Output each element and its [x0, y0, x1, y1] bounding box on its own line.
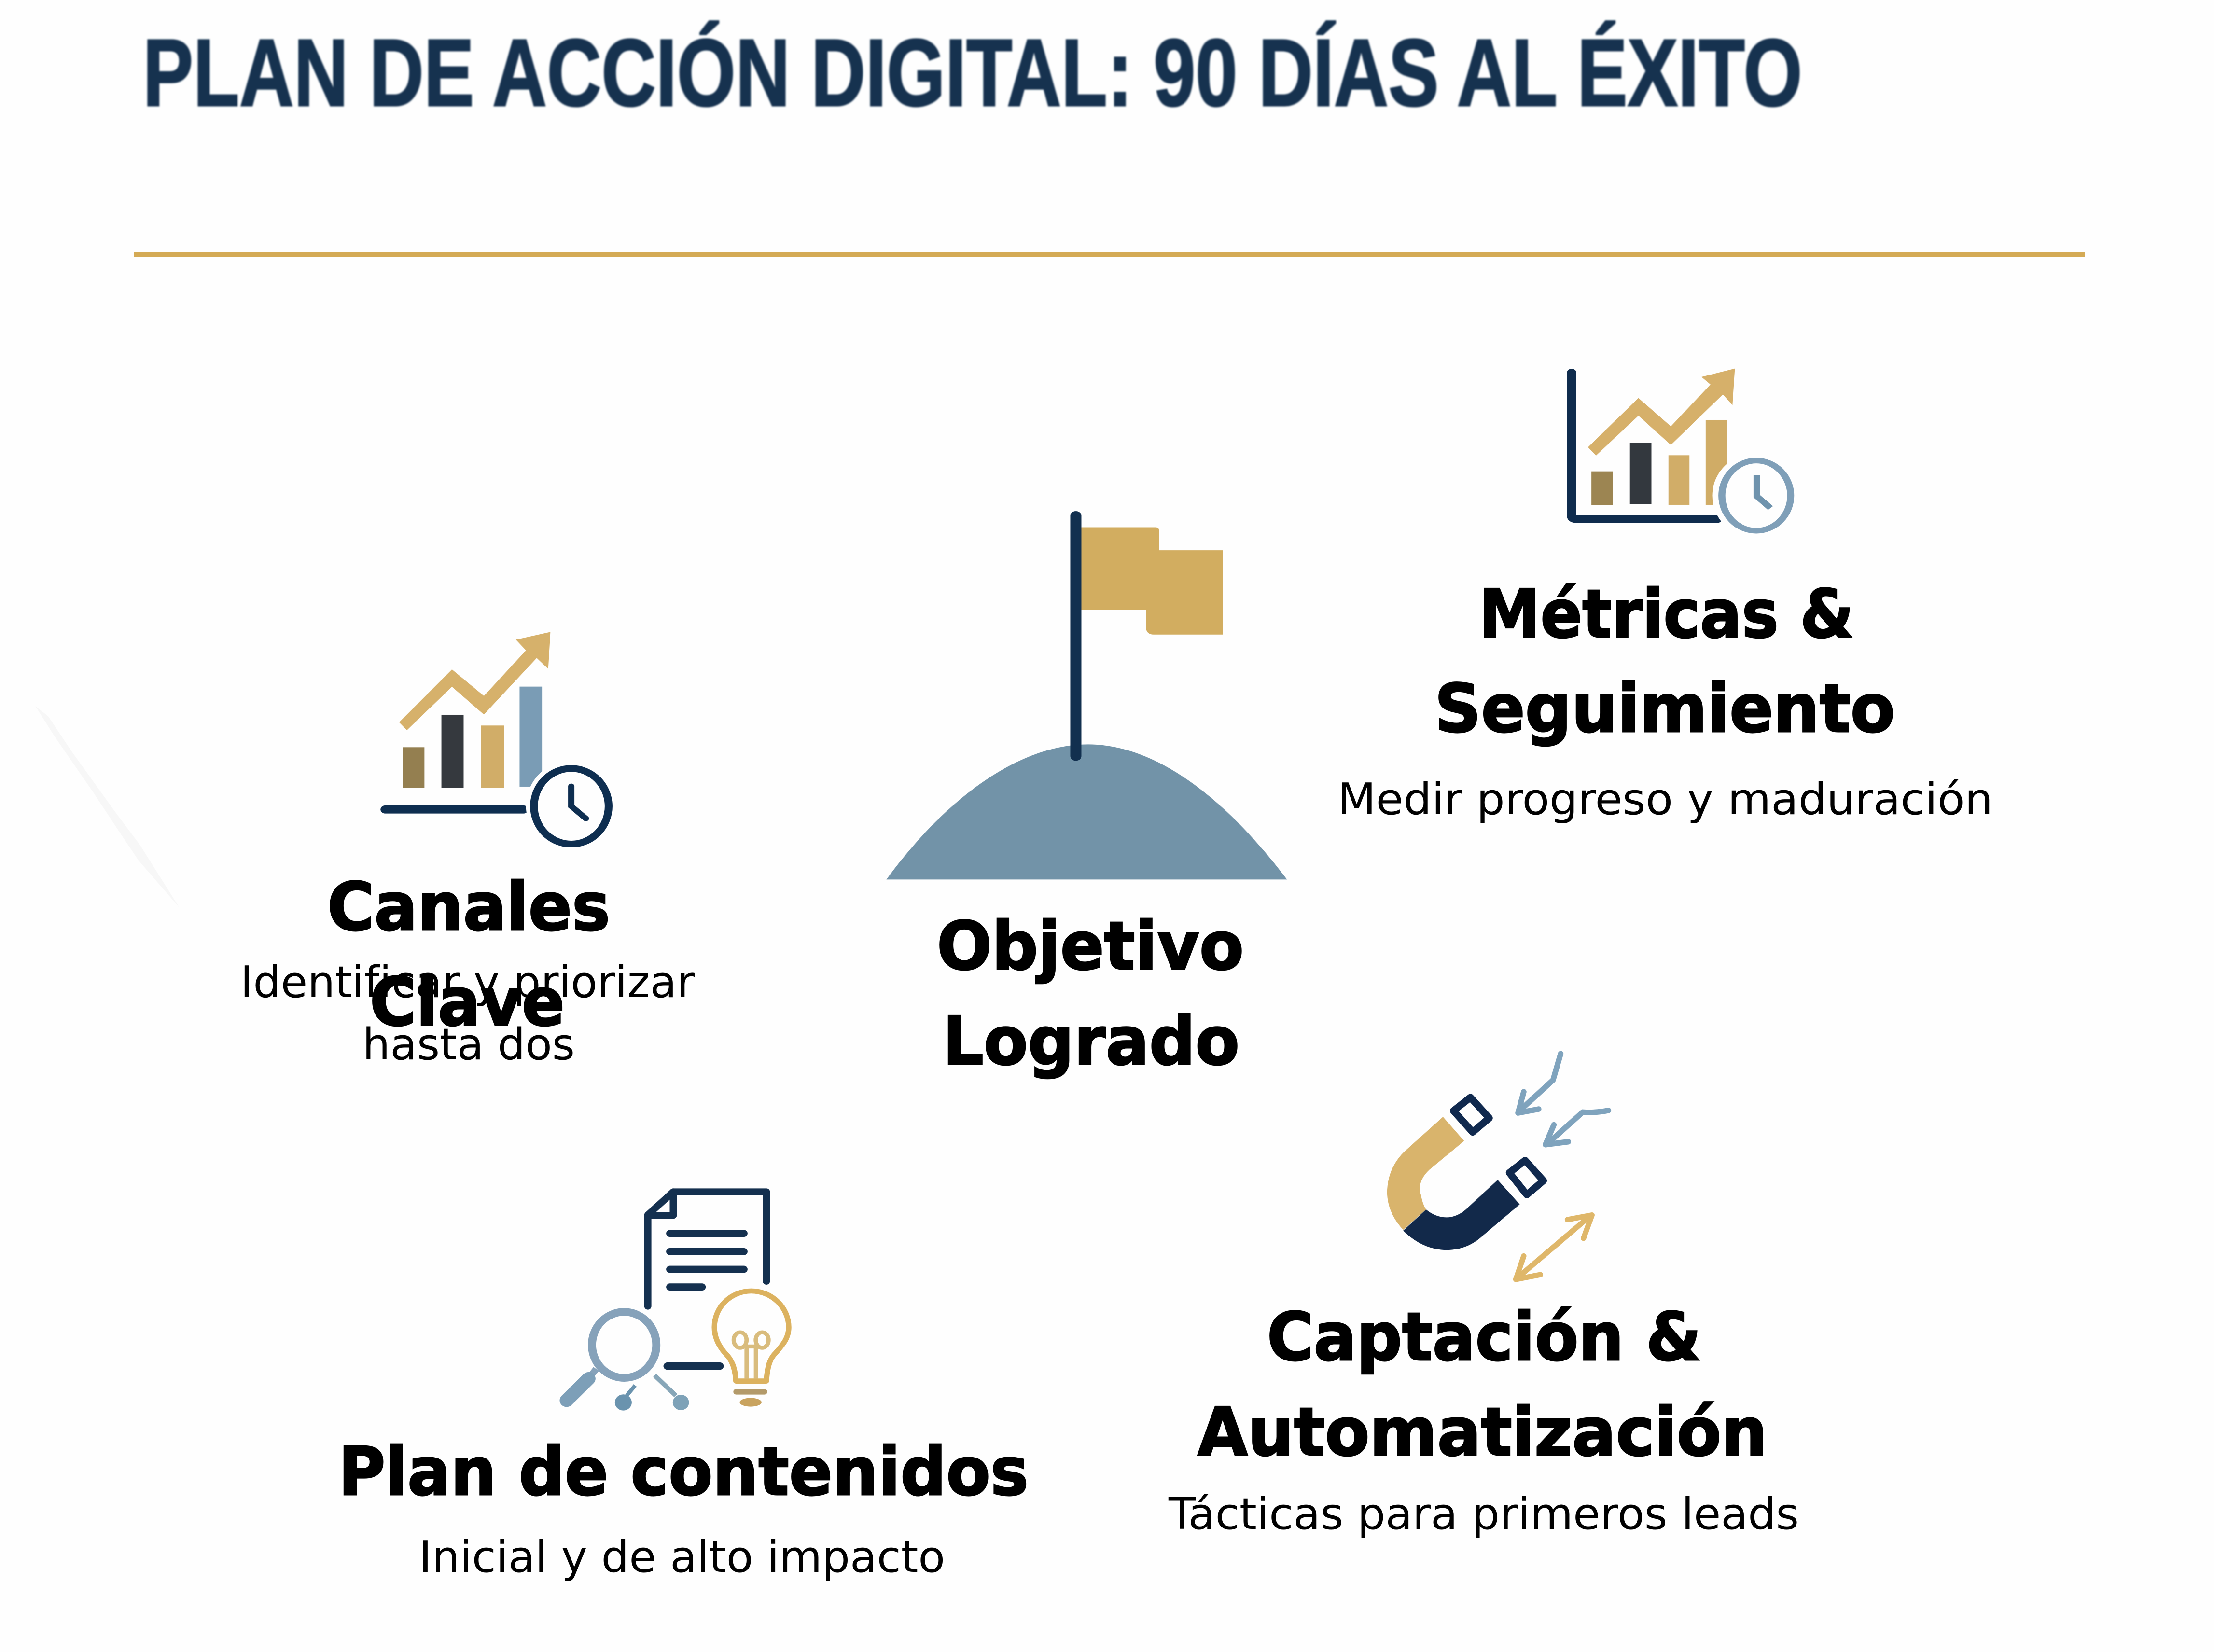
icon: magnet with arrows	[1387, 1054, 1608, 1279]
heading: Objetivo Logrado: Logrado	[943, 1002, 1239, 1080]
heading: Captación & Automatización: Captación &	[1267, 1298, 1701, 1376]
heading: Objetivo Logrado: Objetivo	[937, 907, 1244, 985]
panel: Plan de contenidos	[338, 1192, 1029, 1583]
title underline	[134, 252, 2085, 257]
heading: Captación & Automatización	[1198, 1298, 1768, 1471]
heading: Canales: Canales	[327, 868, 610, 946]
heading: Clave: Clave	[370, 963, 565, 1041]
faint brush streak	[35, 706, 180, 908]
title: PLAN DE ACCIÓN DIGITAL: 90 DÍAS AL ÉXITO	[143, 19, 1802, 126]
icon: chart with clock (metrics)	[1572, 369, 1800, 538]
heading: Captación & Automatización: Automatización	[1198, 1393, 1768, 1471]
icon: flag on mountain	[886, 511, 1287, 879]
description: Tácticas para primeros leads: Tácticas para primeros leads	[1168, 1489, 1799, 1540]
heading: Métricas & Seguimiento	[1434, 575, 1895, 748]
description: Identificar y priorizar hasta dos: hasta dos	[362, 1019, 575, 1070]
heading: Métricas & Seguimiento: Seguimiento	[1434, 670, 1895, 748]
heading: Objetivo Logrado	[937, 907, 1244, 1080]
panel: Canales Clave	[240, 632, 695, 1070]
description: Identificar y priorizar hasta dos	[240, 957, 695, 1070]
description: Medir progreso: Medir progreso y maduración	[1337, 774, 1993, 825]
heading: Métricas & Seguimiento: Métricas &	[1479, 575, 1854, 653]
description: Inicial y de alto impacto: Inicial y de alto impacto	[419, 1532, 945, 1583]
panel: Métricas & Seguimiento	[1337, 369, 1993, 825]
description: Identificar y priorizar hasta dos: Identificar y priorizar	[240, 957, 695, 1008]
icon: document, magnifier and light bulb	[567, 1192, 789, 1411]
heading: Plan de contenidos: Plan de contenidos	[338, 1433, 1029, 1511]
panel: Captación & Automatización	[1168, 1054, 1799, 1540]
icon: chart with clock (channels)	[385, 632, 616, 852]
panel: Objetivo Logrado	[886, 511, 1287, 1080]
